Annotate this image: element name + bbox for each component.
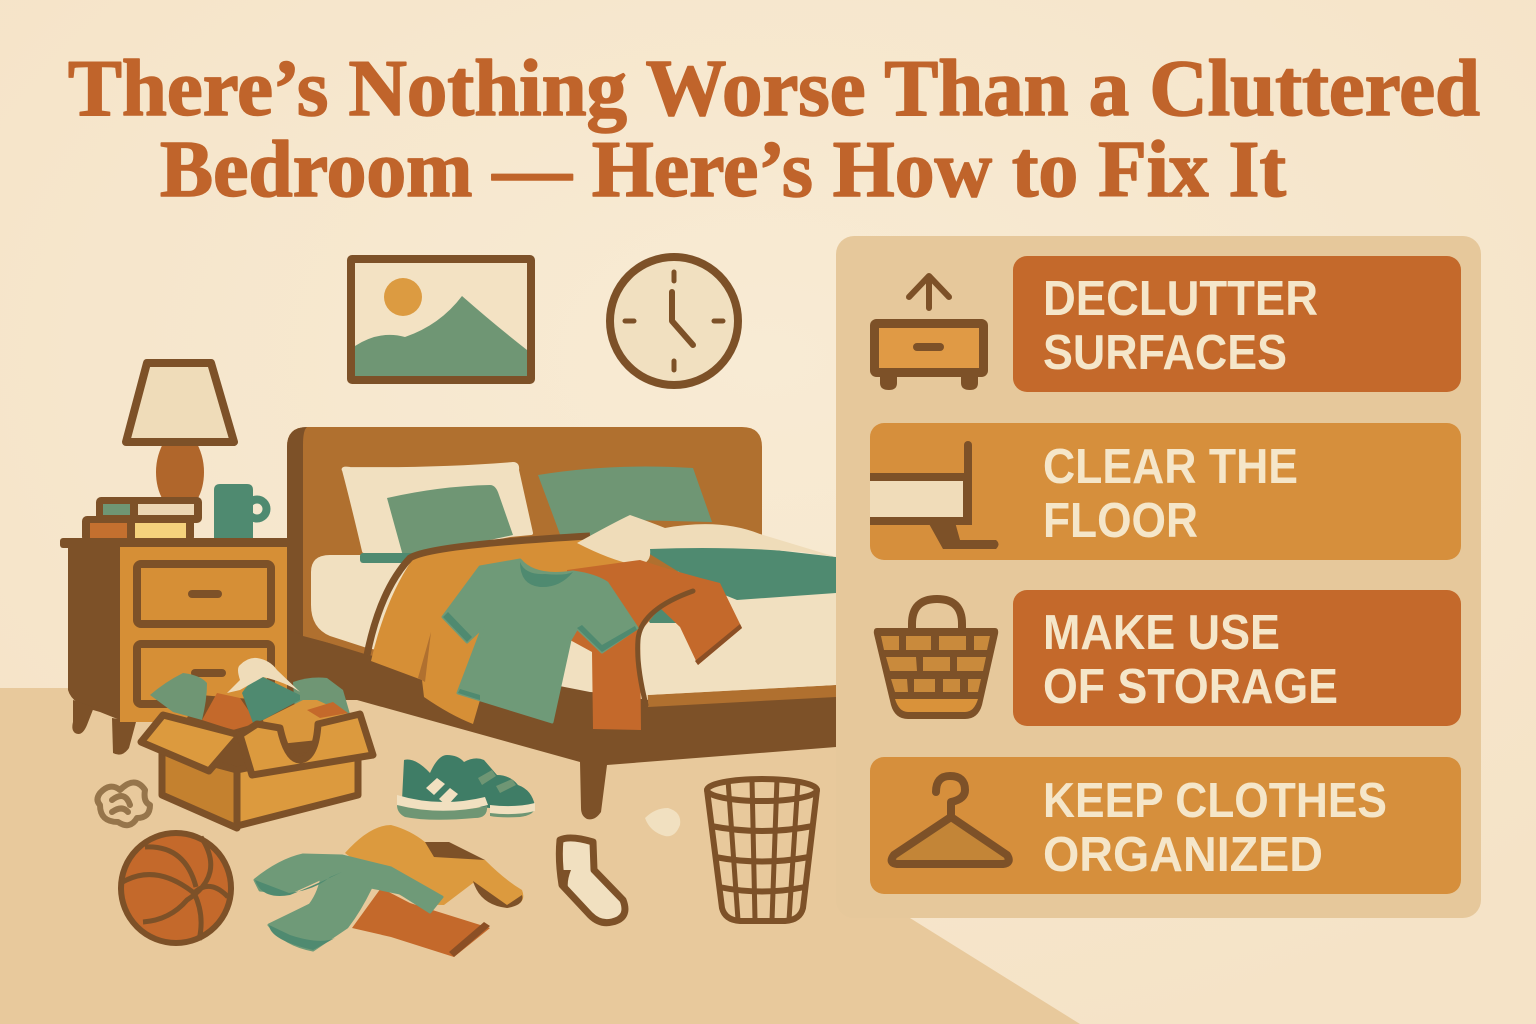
icon: hanger <box>892 776 1009 864</box>
box flaps <box>141 715 240 771</box>
icon: bed corner <box>870 441 998 549</box>
wire wastebasket <box>707 779 817 921</box>
bar: make use of storage: OF STORAGE <box>1043 660 1338 714</box>
headboard shadow edge <box>287 427 307 650</box>
title: Bedroom — Here’s How to Fix It <box>160 126 1286 214</box>
green t-shirt <box>443 560 637 722</box>
bar: make use of storage: MAKE USE <box>1043 606 1280 660</box>
cream sheet <box>577 515 836 565</box>
bar: declutter surfaces: DECLUTTER <box>1043 272 1318 326</box>
mug <box>214 484 266 538</box>
lamp <box>126 363 234 500</box>
wall clock <box>610 257 738 385</box>
pile of clothes on floor <box>255 825 523 957</box>
bar: declutter surfaces: SURFACES <box>1043 326 1287 380</box>
green inner pillow <box>387 485 513 556</box>
bed frame <box>287 630 836 819</box>
clothes in box <box>180 695 350 770</box>
dust crumple <box>98 782 150 825</box>
mattress <box>311 555 836 695</box>
dust ball <box>645 808 680 836</box>
bar: keep clothes organized: ORGANIZED <box>1043 828 1323 882</box>
shirt crease line <box>638 591 693 705</box>
headboard <box>287 427 762 660</box>
framed landscape picture <box>351 259 531 380</box>
icon: nightstand with arrow <box>874 276 984 390</box>
title: There’s Nothing Worse Than a Cluttered <box>68 45 1480 133</box>
bar: make use of storage <box>1013 590 1461 726</box>
basketball <box>121 833 231 943</box>
bar: keep clothes organized: KEEP CLOTHES <box>1043 774 1387 828</box>
bar: clear the floor: CLEAR THE <box>1043 440 1298 494</box>
green pillow <box>538 467 712 537</box>
nightstand <box>60 538 290 755</box>
title <box>68 45 1480 214</box>
bar: clear the floor: FLOOR <box>1043 494 1198 548</box>
bar: keep clothes organized <box>870 757 1461 894</box>
orange shirt <box>567 560 742 730</box>
floor <box>0 688 1080 1024</box>
icon: basket <box>874 599 998 719</box>
frame strip <box>648 685 836 707</box>
amber blanket <box>371 537 640 724</box>
bar: clear the floor <box>870 423 1461 560</box>
cardboard box of clothes <box>141 658 373 828</box>
bed <box>287 427 836 819</box>
box faces <box>162 750 237 828</box>
sock <box>559 838 625 923</box>
stack of books <box>82 497 202 542</box>
bar: declutter surfaces <box>1013 256 1461 392</box>
sneakers <box>397 755 535 820</box>
cream pillow <box>344 464 531 553</box>
panel: tips <box>836 236 1481 918</box>
teal blanket <box>640 546 836 600</box>
